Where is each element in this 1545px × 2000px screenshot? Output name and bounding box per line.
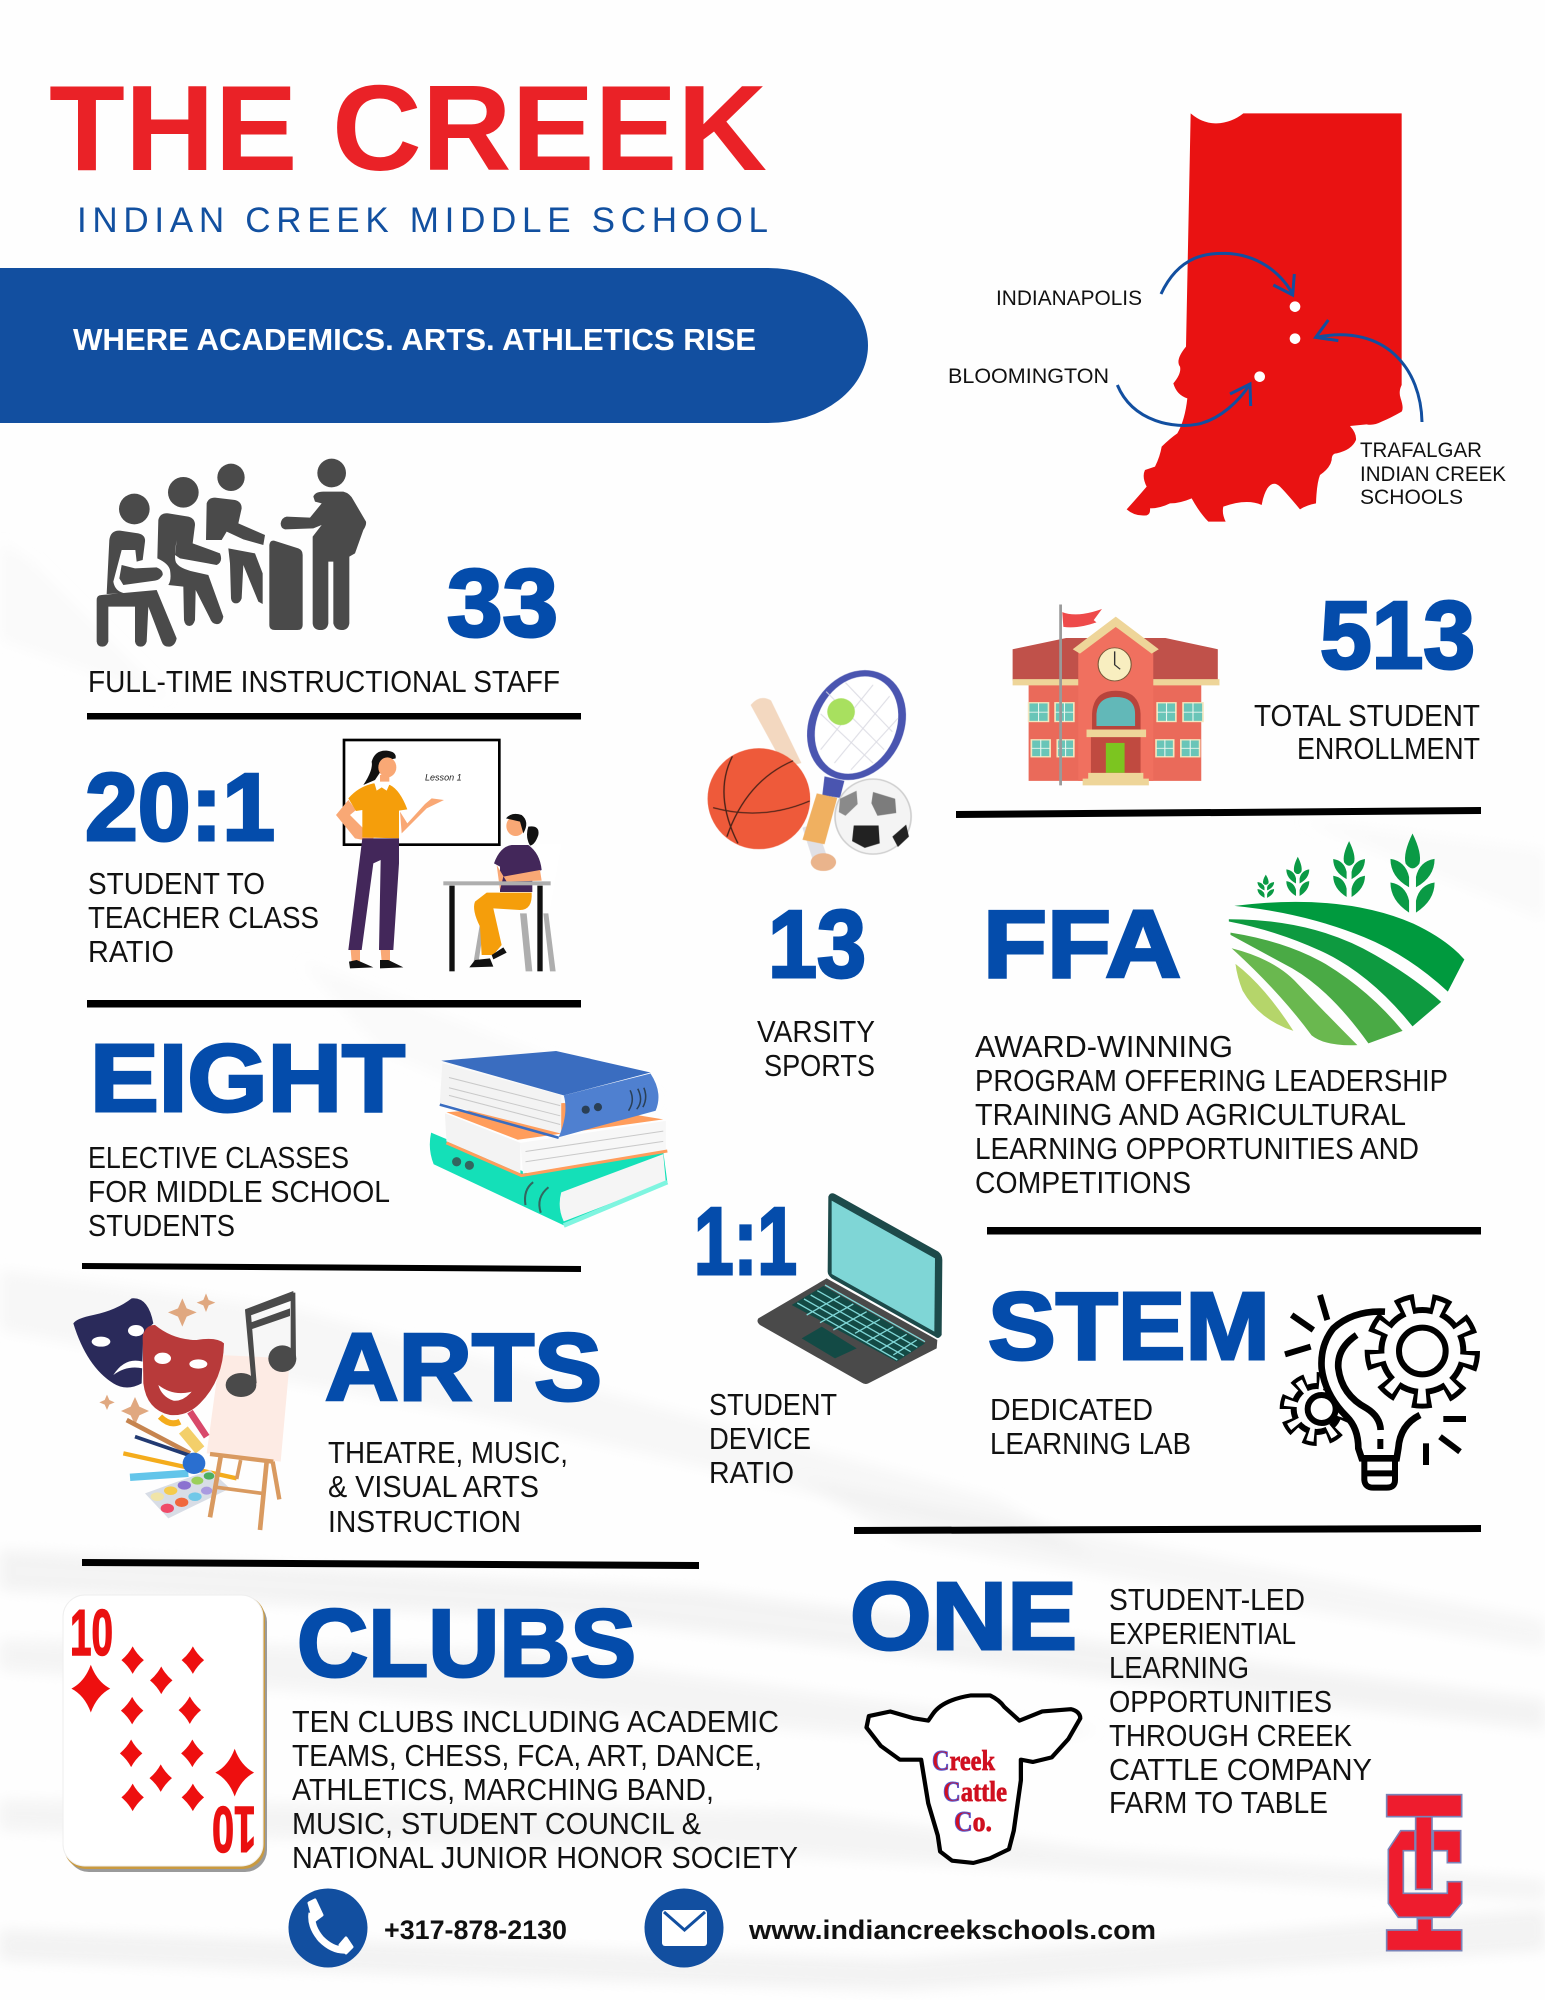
label: ONE: EXPERIENTIAL: [1109, 1616, 1296, 1651]
panel: arts: [73, 1291, 602, 1539]
logo: Creek Cattle Co.: Co.: [954, 1807, 992, 1838]
map of Indiana: [948, 113, 1506, 522]
label: clubs: ATHLETICS, MARCHING BAND,: [292, 1772, 714, 1807]
label: electives: [88, 1140, 390, 1243]
illustration: stack of books: [430, 1051, 667, 1227]
label: FFA: PROGRAM OFFERING LEADERSHIP: [975, 1063, 1448, 1098]
label: electives: FOR MIDDLE SCHOOL: [88, 1174, 390, 1209]
logo: IC monogram: [1387, 1795, 1462, 1951]
illustration: teacher and student: Lesson 1: [425, 773, 462, 783]
icon: ten of diamonds card: [63, 1595, 267, 1872]
subtitle: INDIAN CREEK MIDDLE SCHOOL: [77, 201, 768, 240]
label: FFA: TRAINING AND AGRICULTURAL: [975, 1097, 1406, 1132]
phone number: +317-878-2130: [384, 1915, 567, 1945]
label: arts: & VISUAL ARTS: [328, 1469, 539, 1504]
contact: phone: [288, 1888, 567, 1968]
heading: ONE: ONE: [850, 1563, 1077, 1670]
logo: Creek Cattle Co.: Creek: [932, 1746, 995, 1777]
title: THE CREEK: [49, 60, 767, 196]
label: arts: INSTRUCTION: [328, 1504, 521, 1539]
label: ratio: [88, 866, 319, 969]
label: arts: THEATRE, MUSIC,: [328, 1435, 568, 1470]
label: device ratio: STUDENT: [709, 1387, 837, 1422]
label: STEM: LEARNING LAB: [990, 1426, 1191, 1461]
map shape: [1117, 113, 1422, 522]
label: FFA: AWARD-WINNING: [975, 1029, 1233, 1064]
label: ONE: [1109, 1582, 1372, 1820]
label: ratio: RATIO: [88, 934, 174, 969]
panel: ratio: [85, 740, 562, 971]
label: STEM: [990, 1392, 1191, 1461]
label: ONE: STUDENT-LED: [1109, 1582, 1305, 1617]
icon: ten of diamonds card: 10: [70, 1596, 113, 1669]
label: varsity sports: VARSITY: [757, 1014, 875, 1049]
icon: phone: [288, 1888, 368, 1968]
label: staff: FULL-TIME INSTRUCTIONAL STAFF: [88, 664, 560, 699]
label: Trafalgar: [1360, 439, 1506, 509]
label: electives: ELECTIVE CLASSES: [88, 1140, 349, 1175]
banner: [0, 268, 868, 423]
illustration: masks, note and easel: [73, 1291, 296, 1530]
logo: Creek Cattle Co.: Cattle: [943, 1777, 1007, 1808]
label: device ratio: RATIO: [709, 1455, 794, 1490]
label: ONE: FARM TO TABLE: [1109, 1785, 1328, 1820]
icon: farm field and wheat: [1229, 834, 1464, 1045]
label: device ratio: [709, 1387, 837, 1490]
heading: ARTS: ARTS: [325, 1314, 602, 1421]
stat: 1:1: 1:1: [694, 1188, 797, 1295]
label: Bloomington: BLOOMINGTON: [948, 365, 1109, 388]
label: clubs: [292, 1704, 798, 1875]
label: enrollment: [1254, 698, 1480, 766]
label: varsity sports: [757, 1014, 875, 1083]
label: FFA: COMPETITIONS: [975, 1165, 1191, 1200]
label: ONE: LEARNING: [1109, 1650, 1249, 1685]
illustration: teacher and student: [336, 740, 562, 971]
heading: STEM: STEM: [988, 1273, 1270, 1380]
label: Indianapolis: INDIANAPOLIS: [996, 287, 1142, 310]
panel: electives: [88, 1025, 667, 1243]
label: FFA: LEARNING OPPORTUNITIES AND: [975, 1131, 1419, 1166]
label: arts: [328, 1435, 568, 1539]
logo: Creek Cattle Co.: [866, 1695, 1080, 1863]
website address: www.indiancreekschools.com: [748, 1915, 1156, 1945]
label: electives: STUDENTS: [88, 1208, 235, 1243]
label: varsity sports: SPORTS: [764, 1048, 875, 1083]
panel: STEM: [988, 1273, 1472, 1488]
heading: FFA: FFA: [983, 891, 1181, 998]
label: clubs: TEN CLUBS INCLUDING ACADEMIC: [292, 1704, 779, 1739]
panel: enrollment: [1013, 582, 1480, 785]
panel: varsity sports: [708, 665, 915, 1083]
label: STEM: DEDICATED: [990, 1392, 1153, 1427]
icon: envelope: [644, 1888, 724, 1968]
icon: lightbulb with gears: [1285, 1295, 1472, 1488]
panel: device ratio: [694, 1188, 942, 1490]
illustration: sports balls: [708, 665, 915, 871]
label: ratio: STUDENT TO: [88, 866, 265, 901]
label: clubs: NATIONAL JUNIOR HONOR SOCIETY: [292, 1840, 798, 1875]
icon: ten of diamonds card: 10: [212, 1793, 256, 1866]
label: ratio: TEACHER CLASS: [88, 900, 319, 935]
label: ONE: CATTLE COMPANY: [1109, 1752, 1372, 1787]
label: clubs: MUSIC, STUDENT COUNCIL &: [292, 1806, 701, 1841]
label: ONE: OPPORTUNITIES: [1109, 1684, 1332, 1719]
contact: website: [644, 1888, 1156, 1968]
label: enrollment: TOTAL STUDENT: [1254, 698, 1480, 733]
label: enrollment: ENROLLMENT: [1297, 731, 1480, 766]
label: device ratio: DEVICE: [709, 1421, 811, 1456]
banner text: WHERE ACADEMICS. ARTS. ATHLETICS RISE: [73, 322, 756, 357]
label: Trafalgar: SCHOOLS: [1360, 486, 1463, 509]
panel: FFA: [975, 834, 1464, 1200]
label: Trafalgar: INDIAN CREEK: [1360, 463, 1506, 486]
panel: ONE: [850, 1563, 1372, 1863]
stat: 13: 13: [768, 891, 866, 998]
stat: EIGHT: EIGHT: [90, 1025, 405, 1132]
panel: clubs: [63, 1590, 798, 1875]
label: ONE: THROUGH CREEK: [1109, 1718, 1352, 1753]
icon: staff meeting: [97, 459, 366, 647]
heading: CLUBS: CLUBS: [297, 1590, 636, 1697]
stat: 33: 33: [447, 550, 558, 657]
label: FFA: [975, 1029, 1448, 1200]
panel: staff: [88, 459, 560, 699]
stat: 513: 513: [1320, 582, 1475, 689]
label: Trafalgar: TRAFALGAR: [1360, 439, 1482, 462]
illustration: school building: [1013, 605, 1219, 785]
illustration: laptop: [757, 1193, 942, 1384]
stat: 20:1: 20:1: [85, 754, 275, 861]
label: clubs: TEAMS, CHESS, FCA, ART, DANCE,: [292, 1738, 762, 1773]
